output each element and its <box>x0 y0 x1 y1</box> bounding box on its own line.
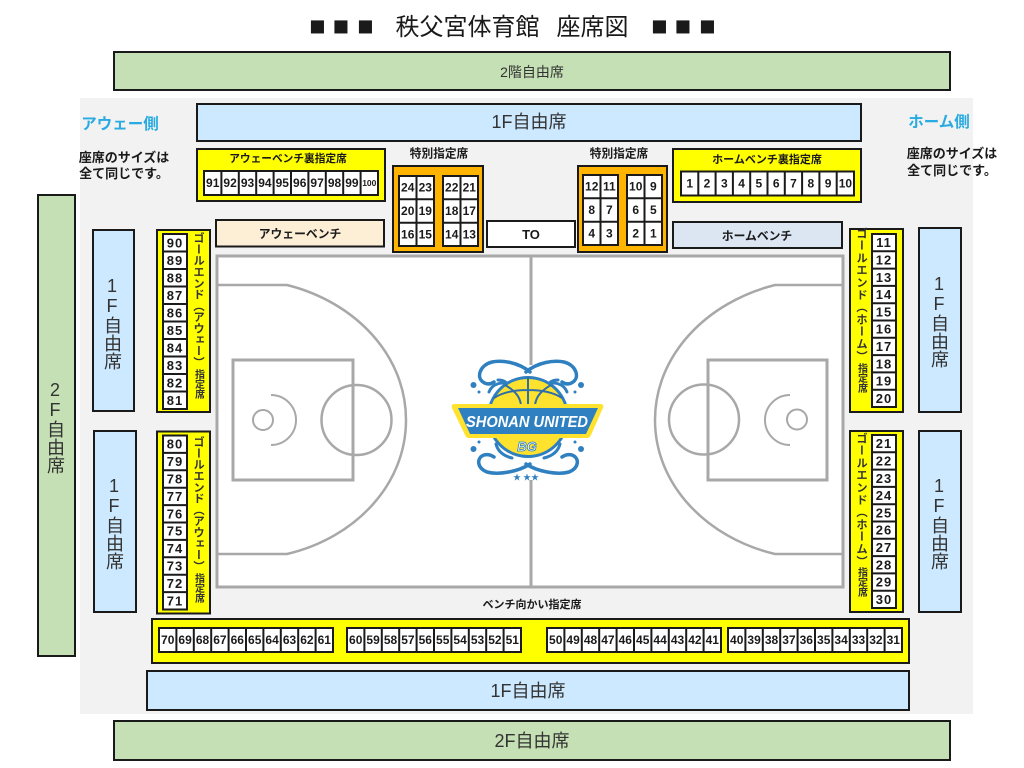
panel: special reserved seats right: 5 <box>650 203 657 217</box>
panel: 1F bottom free seating: 1F自由席 <box>490 681 566 701</box>
panel: goal-end home lower reserved seats: 22 <box>876 453 892 468</box>
note: home seat size <box>907 146 997 178</box>
panel: goal-end away upper reserved seats: ゴールエンド（アウェー） <box>192 231 205 368</box>
label: home side: ホーム側 <box>908 113 970 131</box>
panel: away bench-back reserved seats: 95 <box>276 176 289 190</box>
panel: goal-end home upper reserved seats: 20 <box>876 391 892 406</box>
panel: goal-end home upper reserved seats: 16 <box>876 322 892 337</box>
logo: swirls <box>470 361 584 473</box>
panel: goal-end home upper reserved seats: 15 <box>876 304 892 319</box>
panel: opposite-bench reserved seats: 70 <box>161 633 175 647</box>
panel: 1F left lower free seating <box>94 431 136 612</box>
court: left half markings <box>217 285 406 554</box>
panel: home bench: ホームベンチ <box>722 229 792 243</box>
panel: away bench-back reserved seats: 99 <box>345 176 359 190</box>
note: away seat size: 座席のサイズは <box>79 150 169 165</box>
panel: opposite-bench reserved seats: 41 <box>706 633 719 647</box>
panel: special reserved seats left: 20 <box>401 204 415 218</box>
panel: goal-end home lower reserved seats: 30 <box>876 592 892 607</box>
panel: special reserved seats left: 18 <box>445 204 459 218</box>
panel: opposite-bench reserved seats: 49 <box>566 633 580 647</box>
panel: goal-end home lower reserved seats: 28 <box>876 557 892 572</box>
panel: home bench-back reserved seats: 7 <box>790 176 797 190</box>
panel: goal-end home upper reserved seats: 13 <box>876 270 892 285</box>
panel: special reserved seats right: 7 <box>606 203 613 217</box>
panel: home bench-back reserved seats: 9 <box>825 176 832 190</box>
panel: special reserved seats right: 6 <box>632 203 639 217</box>
panel: opposite-bench reserved seats: 31 <box>887 633 900 647</box>
panel: special reserved seats left: 19 <box>419 204 432 218</box>
panel: goal-end away lower reserved seats: 指定席 <box>192 572 204 604</box>
panel: opposite-bench reserved seats: 66 <box>231 633 244 647</box>
panel: goal-end home upper reserved seats: 17 <box>876 339 892 354</box>
panel: opposite-bench reserved seats: 44 <box>653 633 667 647</box>
title: 秩父宮体育館 <box>396 14 540 41</box>
panel: home bench-back reserved seats: 3 <box>721 176 728 190</box>
panel: opposite-bench reserved seats: 57 <box>401 633 415 647</box>
panel: opposite-bench reserved seats: 34 <box>834 633 848 647</box>
panel: goal-end away lower reserved seats: 72 <box>167 576 183 591</box>
panel: goal-end away upper reserved seats: 84 <box>167 340 183 355</box>
panel: 2F left free seating <box>38 195 75 656</box>
panel: special reserved seats right: 11 <box>603 180 616 194</box>
panel: 2F bottom free seating <box>114 721 950 760</box>
panel: opposite-bench reserved seats: 68 <box>196 633 209 647</box>
logo: banner <box>452 404 603 438</box>
panel: opposite-bench reserved seats: 39 <box>747 633 761 647</box>
title <box>309 11 716 41</box>
panel: opposite-bench reserved seats: 56 <box>419 633 432 647</box>
panel: 2F left free seating: 2F自由席 <box>45 380 65 474</box>
panel: goal-end away upper reserved seats: 指定席 <box>192 368 204 400</box>
panel: 2F top free seating <box>114 52 950 90</box>
panel: opposite-bench reserved seats: 59 <box>366 633 380 647</box>
panel: opposite-bench reserved seats: 60 <box>349 633 363 647</box>
panel: goal-end home upper reserved seats <box>850 226 903 412</box>
panel: home bench <box>673 222 842 248</box>
panel: away bench-back reserved seats: アウェーベンチ裏指定席 <box>229 152 347 165</box>
panel: goal-end home lower reserved seats: 26 <box>876 523 892 538</box>
panel: goal-end home upper reserved seats: 18 <box>876 356 892 371</box>
panel: goal-end home upper reserved seats: ゴールエンド（ホーム） <box>855 226 868 363</box>
title: 座席図 <box>556 14 628 41</box>
panel: goal-end away upper reserved seats: 82 <box>167 375 183 390</box>
panel: goal-end away lower reserved seats: 71 <box>167 593 183 608</box>
panel: 2F bottom free seating: 2F自由席 <box>494 731 570 751</box>
panel: home bench-back reserved seats: 5 <box>756 176 763 190</box>
panel: special reserved seats right: 2 <box>632 226 639 240</box>
panel: goal-end away upper reserved seats: 83 <box>167 358 183 373</box>
panel: opposite-bench reserved seats <box>152 619 909 663</box>
panel: TO table: TO <box>522 227 540 242</box>
panel: opposite-bench reserved seats: 45 <box>636 633 650 647</box>
panel: goal-end away upper reserved seats <box>157 230 210 412</box>
panel: opposite-bench reserved seats: 53 <box>471 633 484 647</box>
panel: 1F right lower free seating: 1F自由席 <box>929 476 949 570</box>
panel: goal-end home lower reserved seats: 27 <box>876 540 892 555</box>
note: away seat size <box>79 150 169 181</box>
panel: home bench-back reserved seats: 4 <box>738 176 745 190</box>
panel: opposite-bench reserved seats: 35 <box>817 633 831 647</box>
heading: special reserved left: 特別指定席 <box>410 146 469 160</box>
panel: opposite-bench reserved seats: 33 <box>852 633 865 647</box>
panel: goal-end home lower reserved seats <box>850 431 903 612</box>
panel: opposite-bench reserved seats: 32 <box>869 633 883 647</box>
panel: goal-end away upper reserved seats: 87 <box>167 288 183 303</box>
panel: goal-end home upper reserved seats: 19 <box>876 374 892 389</box>
panel: opposite-bench reserved seats: 38 <box>765 633 778 647</box>
panel: goal-end away lower reserved seats: 76 <box>167 506 183 521</box>
panel: opposite-bench reserved seats: 36 <box>800 633 813 647</box>
panel: goal-end home lower reserved seats: 指定席 <box>856 566 868 598</box>
panel: opposite-bench reserved seats: 43 <box>671 633 684 647</box>
panel: away bench-back reserved seats: 93 <box>241 176 254 190</box>
title: ■■■ <box>309 11 374 41</box>
heading: opposite-bench reserved seats: ベンチ向かい指定席 <box>482 597 582 611</box>
panel: special reserved seats left: 21 <box>463 181 476 195</box>
panel: opposite-bench reserved seats: 42 <box>688 633 702 647</box>
panel: home bench-back reserved seats <box>673 149 861 202</box>
panel: opposite-bench reserved seats: 55 <box>436 633 450 647</box>
basketball court <box>217 256 843 587</box>
panel: opposite-bench reserved seats: 63 <box>283 633 296 647</box>
title: ■■■ <box>651 11 716 41</box>
panel: special reserved seats left: 22 <box>445 181 459 195</box>
panel: goal-end home lower reserved seats: 25 <box>876 505 892 520</box>
panel: home bench-back reserved seats: 10 <box>839 176 852 190</box>
logo: banner: SHONAN UNITED <box>466 414 588 431</box>
panel: goal-end away lower reserved seats: 77 <box>167 489 183 504</box>
panel: opposite-bench reserved seats: 64 <box>265 633 279 647</box>
panel: goal-end home lower reserved seats: 23 <box>876 471 892 486</box>
panel: goal-end away upper reserved seats: 81 <box>167 393 183 408</box>
court: right half markings <box>655 285 843 554</box>
panel: goal-end home upper reserved seats: 11 <box>876 235 892 250</box>
panel: special reserved seats left: 15 <box>419 227 432 241</box>
panel: home bench-back reserved seats: 6 <box>773 176 780 190</box>
logo: stars: ★★★ <box>513 473 539 482</box>
panel: special reserved seats left: 17 <box>463 204 476 218</box>
panel: goal-end away upper reserved seats: 88 <box>167 270 183 285</box>
panel: goal-end home upper reserved seats: 14 <box>876 287 892 302</box>
panel: away bench-back reserved seats: 97 <box>310 176 324 190</box>
panel: special reserved seats left <box>393 166 483 252</box>
panel: opposite-bench reserved seats: 52 <box>488 633 502 647</box>
panel: goal-end away lower reserved seats: 80 <box>167 437 183 452</box>
panel: goal-end away lower reserved seats: 75 <box>167 524 183 539</box>
panel: opposite-bench reserved seats: 50 <box>549 633 563 647</box>
panel: opposite-bench reserved seats: 48 <box>584 633 597 647</box>
note: away seat size: 全て同じです。 <box>79 166 169 181</box>
panel: opposite-bench reserved seats: 40 <box>730 633 744 647</box>
panel: special reserved seats right: 1 <box>650 226 657 240</box>
panel: opposite-bench reserved seats: 46 <box>619 633 632 647</box>
panel: goal-end away upper reserved seats: 85 <box>167 323 183 338</box>
panel: special reserved seats right: 9 <box>650 180 657 194</box>
panel: away bench: アウェーベンチ <box>259 227 341 241</box>
panel: special reserved seats right <box>578 166 667 252</box>
panel: opposite-bench reserved seats: 58 <box>384 633 397 647</box>
panel: goal-end away lower reserved seats: 73 <box>167 558 183 574</box>
panel: goal-end away upper reserved seats: 89 <box>167 253 183 268</box>
panel: opposite-bench reserved seats: 67 <box>213 633 227 647</box>
panel: goal-end away upper reserved seats: 90 <box>167 235 183 250</box>
panel: special reserved seats left: 14 <box>445 227 459 241</box>
panel: goal-end home lower reserved seats: 24 <box>876 488 892 503</box>
panel: TO table <box>487 221 575 247</box>
panel: away bench-back reserved seats: 96 <box>293 176 307 190</box>
label: away side: アウェー側 <box>81 115 159 133</box>
panel: goal-end away lower reserved seats: ゴールエンド（アウェー） <box>192 435 205 572</box>
panel: 1F right upper free seating <box>919 228 961 412</box>
panel: 1F left upper free seating: 1F自由席 <box>102 276 122 370</box>
panel: away bench-back reserved seats: 94 <box>258 176 272 190</box>
logo: basketball <box>488 377 568 456</box>
panel: special reserved seats left: 16 <box>401 227 415 241</box>
logo: BG badge: BG <box>517 439 537 454</box>
panel: opposite-bench reserved seats: 47 <box>601 633 615 647</box>
panel: opposite-bench reserved seats: 69 <box>178 633 192 647</box>
panel: away bench-back reserved seats: 98 <box>328 176 341 190</box>
panel: opposite-bench reserved seats: 62 <box>300 633 314 647</box>
panel: goal-end home upper reserved seats: 12 <box>876 252 892 267</box>
panel: home bench-back reserved seats: 8 <box>807 176 814 190</box>
panel: 1F bottom free seating <box>147 671 909 710</box>
panel: away bench <box>216 220 384 246</box>
panel: special reserved seats right: 10 <box>629 180 643 194</box>
panel: 1F left upper free seating <box>93 230 134 411</box>
panel: opposite-bench reserved seats: 37 <box>782 633 796 647</box>
panel: 1F top free seating <box>197 104 861 141</box>
panel: special reserved seats left: 24 <box>401 181 415 195</box>
panel: goal-end away lower reserved seats: 78 <box>167 472 183 486</box>
panel: away bench-back reserved seats: 91 <box>206 176 220 190</box>
note: home seat size: 座席のサイズは <box>907 146 997 161</box>
panel: home bench-back reserved seats: 1 <box>686 176 693 190</box>
panel: goal-end home lower reserved seats: 21 <box>876 436 892 451</box>
panel: goal-end home lower reserved seats: 29 <box>876 575 892 590</box>
panel: opposite-bench reserved seats: 54 <box>453 633 467 647</box>
panel: special reserved seats right: 8 <box>588 203 595 217</box>
panel: opposite-bench reserved seats: 51 <box>506 633 519 647</box>
panel: home bench-back reserved seats: ホームベンチ裏指定席 <box>712 152 822 166</box>
panel: goal-end home upper reserved seats: 指定席 <box>856 362 868 394</box>
logo: Shonan United BG <box>452 361 603 482</box>
panel: special reserved seats right: 4 <box>588 226 595 240</box>
panel: 1F right upper free seating: 1F自由席 <box>929 274 949 368</box>
panel: special reserved seats right: 12 <box>585 180 599 194</box>
note: home seat size: 全て同じです。 <box>907 163 997 178</box>
panel: 1F top free seating: 1F自由席 <box>491 112 567 132</box>
panel: special reserved seats right: 3 <box>606 226 613 240</box>
panel: away bench-back reserved seats: 100 <box>362 178 377 188</box>
panel: home bench-back reserved seats: 2 <box>704 176 711 190</box>
panel: away bench-back reserved seats: 92 <box>223 176 237 190</box>
heading: special reserved right: 特別指定席 <box>590 146 649 160</box>
panel: goal-end away upper reserved seats: 86 <box>167 305 183 320</box>
panel: goal-end away lower reserved seats: 74 <box>167 541 183 556</box>
panel: special reserved seats left: 23 <box>419 181 432 195</box>
panel: goal-end away lower reserved seats: 79 <box>167 454 183 469</box>
panel: opposite-bench reserved seats: 61 <box>318 633 331 647</box>
panel: special reserved seats left: 13 <box>463 227 476 241</box>
panel: away bench-back reserved seats <box>197 149 385 201</box>
panel: 1F right lower free seating <box>919 431 961 612</box>
panel: 2F top free seating: 2階自由席 <box>500 64 564 80</box>
panel: opposite-bench reserved seats: 65 <box>248 633 262 647</box>
panel: goal-end home lower reserved seats: ゴールエンド（ホーム） <box>855 431 868 568</box>
panel: goal-end away lower reserved seats <box>157 432 210 614</box>
panel: 1F left lower free seating: 1F自由席 <box>104 476 124 570</box>
